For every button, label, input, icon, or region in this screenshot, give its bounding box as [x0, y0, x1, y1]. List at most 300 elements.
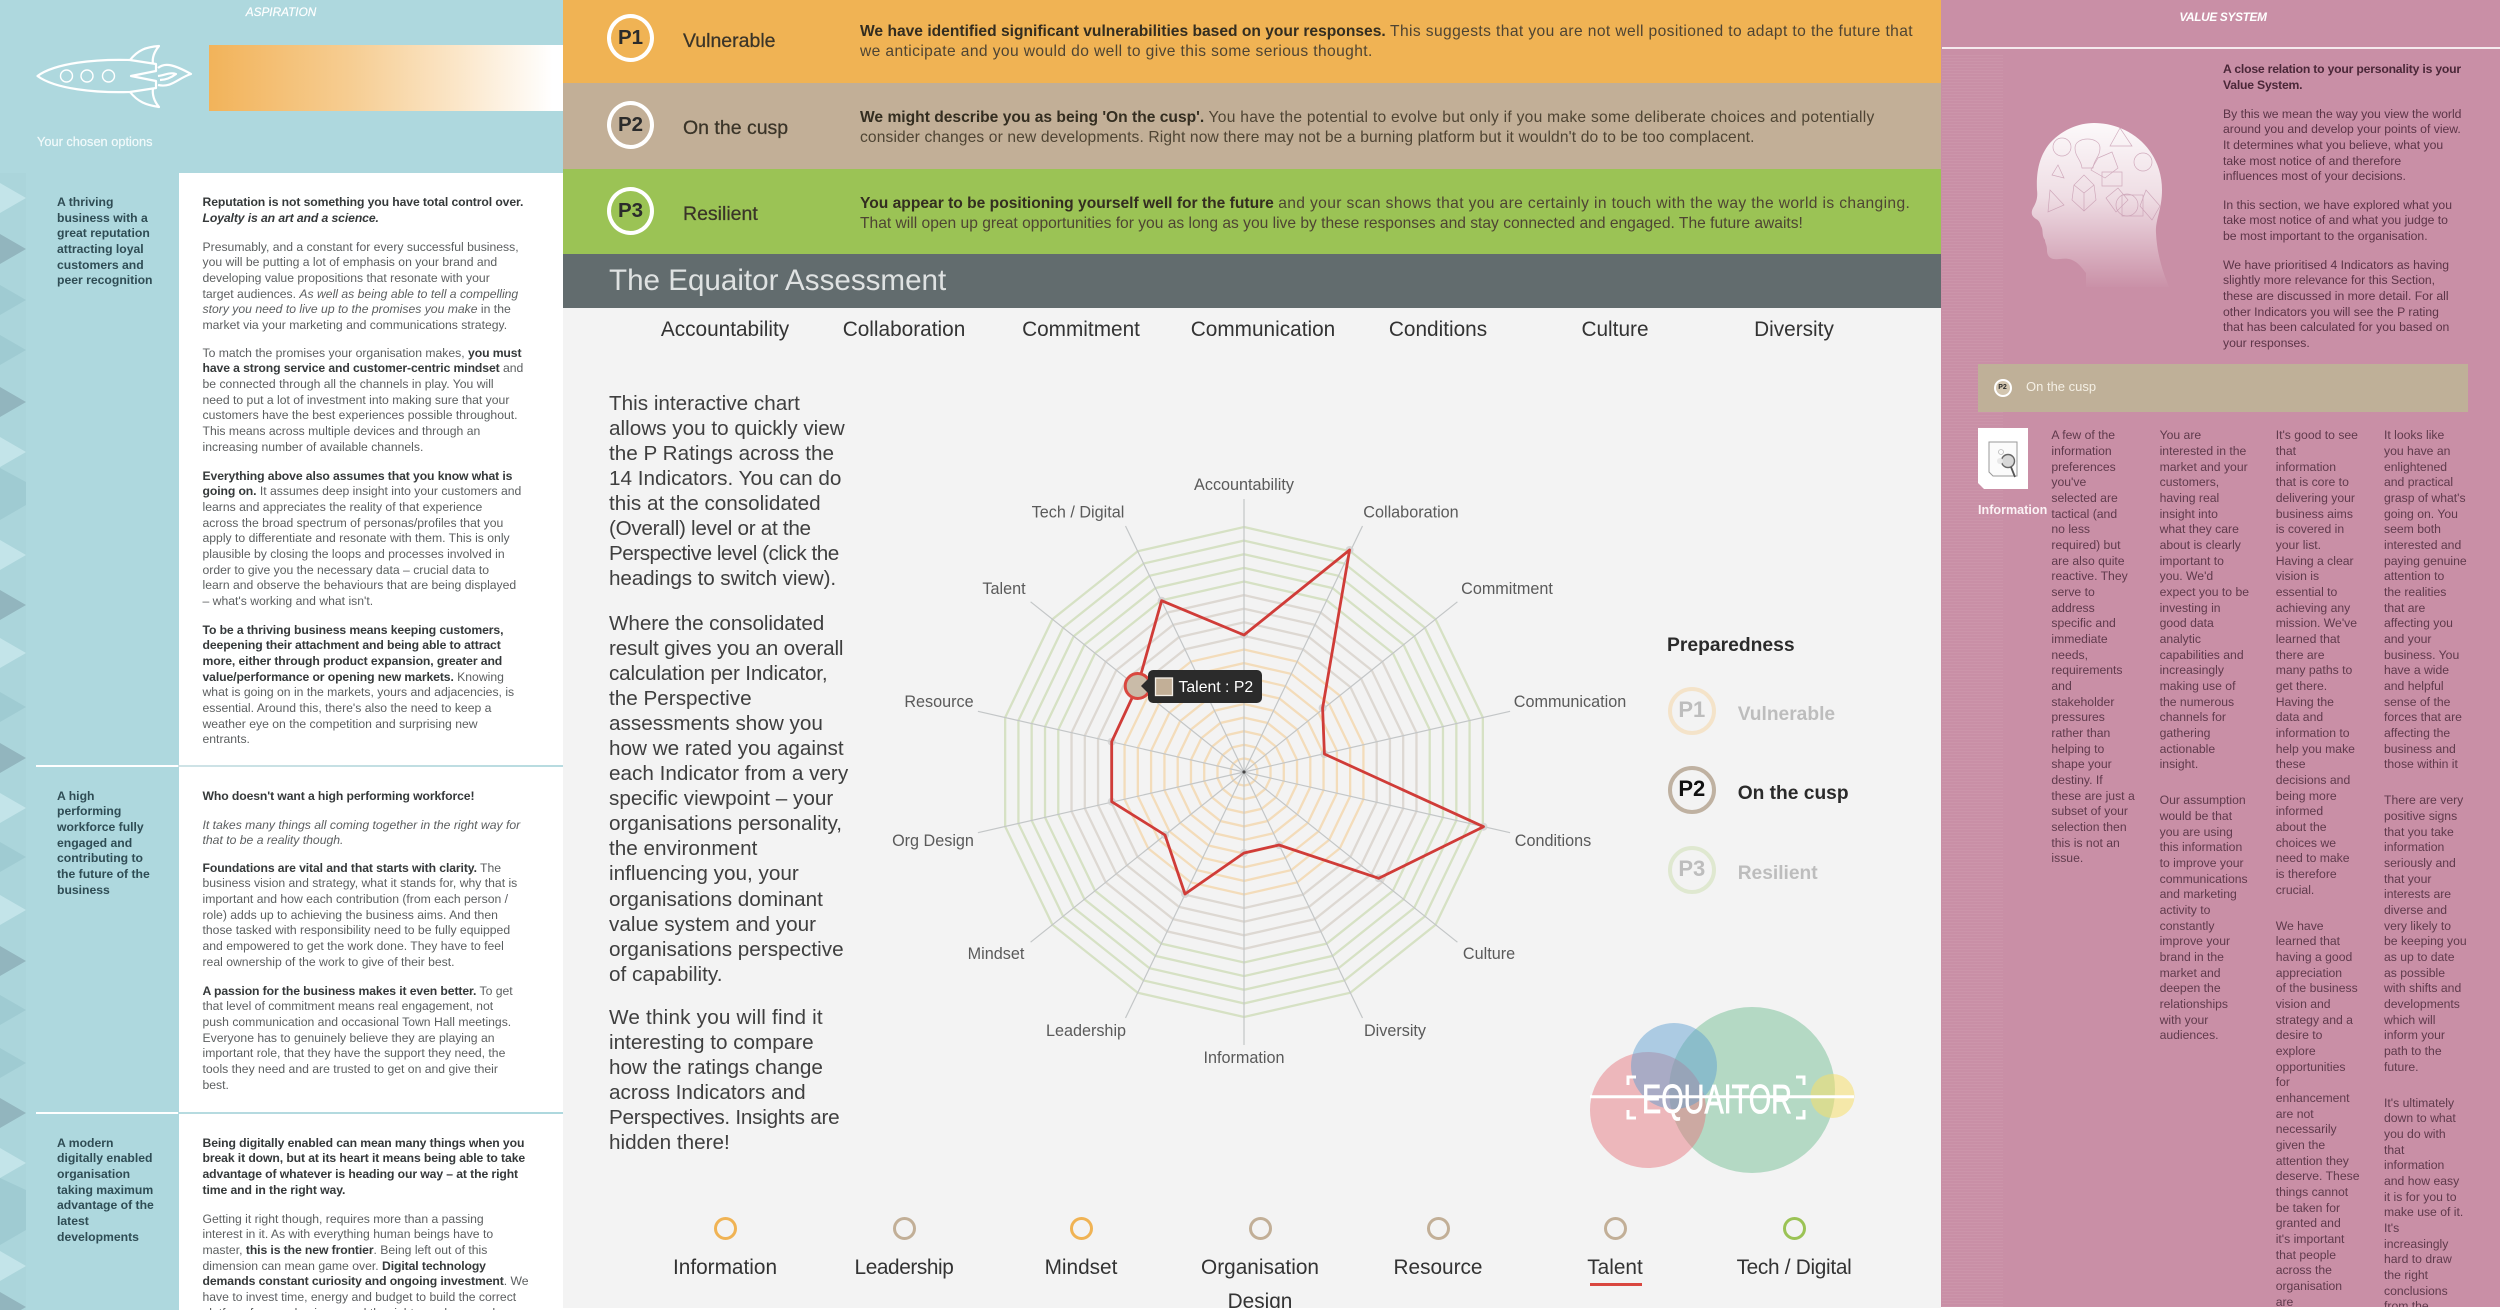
paragraph one: capabilities and: [2160, 648, 2244, 662]
paragraph two: would be that: [2160, 809, 2232, 823]
text: to be a thriving business: [202, 623, 514, 746]
paragraph two: of the business: [2276, 981, 2358, 995]
text: chart closing: We think you will find it: [609, 1006, 823, 1028]
axis labels: Resource: [904, 693, 974, 711]
paragraph one: customers,: [2160, 475, 2219, 489]
divider: row two: [36, 1112, 563, 1114]
paragraph one: important to: [2160, 554, 2224, 568]
paragraph: subset of your: [2051, 804, 2128, 818]
text: chart explanation: calculation per Indicator,: [609, 662, 827, 685]
paragraph: tactical (and: [2051, 507, 2117, 521]
text: a passion: A passion for the business makes it even better. To get: [202, 984, 513, 998]
paragraph two: brand in the: [2160, 950, 2224, 964]
dot: tech digital: [1783, 1217, 1806, 1240]
tab: organisation design: Organisation: [1201, 1256, 1319, 1279]
paragraph two: for: [2276, 1075, 2290, 1089]
tab: leadership: Leadership: [855, 1256, 953, 1279]
axis labels: Communication: [1514, 693, 1626, 711]
paragraph one: these: [2276, 757, 2306, 771]
paragraph three: it is for you to: [2384, 1190, 2456, 1204]
text: a passion: important role, that they have the support they need, the: [202, 1046, 505, 1060]
tab: tech digital: Tech / Digital: [1737, 1256, 1851, 1279]
paragraph two: There are very: [2384, 793, 2463, 807]
paragraph one: choices we: [2276, 836, 2336, 850]
paragraph one: affecting the: [2384, 726, 2450, 740]
label: resilient: Resilient: [683, 203, 758, 225]
text: being digitally enabled: [202, 1136, 525, 1197]
option label: digitally enabled organisation: digitally enabled: [57, 1151, 152, 1165]
paragraph two: desire to: [2276, 1028, 2322, 1042]
paragraph three: increasingly: [2384, 1237, 2448, 1251]
label: on the cusp: On the cusp: [683, 117, 788, 139]
paragraph one: delivering your: [2276, 491, 2355, 505]
option label: high performing workforce: performing: [57, 804, 121, 818]
text: a passion: that level of commitment means real engagement, not: [202, 999, 493, 1013]
rating band: on the cusp: [1978, 364, 2468, 412]
option label: thriving business: [57, 195, 152, 287]
option label: digitally enabled organisation: taking maximum: [57, 1183, 153, 1197]
paragraph two: necessarily: [2276, 1122, 2337, 1136]
paragraph one: essential to: [2276, 585, 2337, 599]
paragraph: these are just a: [2051, 789, 2135, 803]
text: chart closing: across Indicators and: [609, 1081, 806, 1104]
tab: mindset: Mindset: [1045, 1256, 1117, 1279]
paragraph two: and marketing: [2160, 887, 2237, 901]
paragraph one: increasingly: [2160, 663, 2224, 677]
text: getting it right: demands constant curiosity and ongoing investment. We: [202, 1274, 529, 1288]
paragraph two: vision and: [2276, 997, 2331, 1011]
text: everything above: learn and observe the behaviours that are being displayed: [202, 578, 516, 592]
paragraph one: there are: [2276, 648, 2324, 662]
paragraph one: about is clearly: [2160, 538, 2241, 552]
option label: thriving business: customers and: [57, 258, 144, 272]
paragraph two: given the: [2276, 1138, 2325, 1152]
badge: P3: P3: [618, 198, 643, 222]
paragraph two: [2384, 793, 2467, 1075]
tab: information: Information: [673, 1256, 777, 1279]
tab: diversity: Diversity: [1754, 318, 1834, 341]
paragraph three: conclusions: [2384, 1284, 2448, 1298]
paragraph one: those within it: [2384, 757, 2458, 771]
paragraph two: diverse and: [2384, 903, 2447, 917]
text: we have prioritised: We have prioritised 4 Indicators as having: [2223, 258, 2449, 272]
label: vulnerable: Vulnerable: [683, 30, 776, 52]
text: in this section: take most notice of and what you judge to: [2223, 213, 2448, 227]
axis labels: Org Design: [892, 832, 974, 850]
legend heading: Preparedness: [1667, 634, 1795, 656]
text: everything above: plausible by closing the loops and processes involved in: [202, 547, 505, 561]
text: chart intro: the P Ratings across the: [609, 442, 834, 465]
text: by this we mean: [2223, 106, 2461, 183]
paragraph: A few of the: [2051, 428, 2115, 442]
paragraph: and: [2051, 679, 2072, 693]
paragraph two: communications: [2160, 872, 2248, 886]
legend badge: P2: P2: [1678, 776, 1705, 800]
paragraph one: analytic: [2160, 632, 2201, 646]
option label: thriving business: A thriving: [57, 195, 113, 209]
paragraph one: get there.: [2276, 679, 2327, 693]
description: P3: [860, 195, 1910, 232]
axis labels: Conditions: [1515, 832, 1591, 850]
text: a passion: Everyone has to genuinely believe they are playing an: [202, 1031, 495, 1045]
status dots row: [714, 1217, 1806, 1240]
text: reputation intro: Reputation is not something you have total control over.: [202, 195, 523, 209]
option label: digitally enabled organisation: developments: [57, 1230, 139, 1244]
paragraph three: It's: [2384, 1221, 2399, 1235]
paragraph: required) but: [2051, 538, 2120, 552]
column four: [2384, 428, 2467, 1310]
title bar: [563, 254, 1941, 308]
legend label: resilient: Resilient: [1738, 862, 1818, 884]
text: presumably: Presumably, and a constant for every successful business,: [202, 240, 519, 254]
paragraph one: data and: [2276, 710, 2323, 724]
paragraph two: market and: [2160, 966, 2221, 980]
dot: mindset: [1070, 1217, 1093, 1240]
text: to be a thriving business: weather eye on the competition and surprising new: [202, 717, 478, 731]
option label: thriving business: peer recognition: [57, 273, 152, 287]
paragraph one: the numerous: [2160, 695, 2234, 709]
text: foundations: real ownership of the work to give of their best.: [202, 955, 455, 969]
description: P1: We have identified significant vulnerabilities based on your responses. This suggests that you are not well positioned to adapt to the future that: [860, 23, 1913, 40]
paragraph: requirements: [2051, 663, 2123, 677]
text: reputation intro: Loyalty is an art and a science.: [202, 211, 379, 225]
paragraph one: that: [2276, 444, 2296, 458]
paragraph one: the realities: [2384, 585, 2446, 599]
text: chart closing: hidden there!: [609, 1131, 730, 1154]
text: to match the promises: To match the promises your organisation makes, you must: [202, 346, 521, 360]
paragraph one: attention to: [2384, 569, 2444, 583]
paragraph: information: [2051, 444, 2112, 458]
paragraph one: what they care: [2160, 522, 2239, 536]
paragraph two: Our assumption: [2160, 793, 2246, 807]
text: it takes many things: that to be a reality though.: [202, 833, 343, 847]
text: everything above: order to give you the necessary data – crucial data to: [202, 563, 489, 577]
paragraph three: the right: [2384, 1268, 2428, 1282]
paragraph two: [2276, 919, 2359, 1310]
text: foundations: and empowered to get the work done. They have to feel: [202, 939, 504, 953]
text: by this we mean: around you and develop your points of view.: [2223, 122, 2461, 136]
paragraph two: relationships: [2160, 997, 2228, 1011]
text: a passion: best.: [202, 1078, 229, 1092]
tab: communication: Communication: [1191, 318, 1335, 341]
text: chart explanation: the Perspective: [609, 687, 752, 710]
paragraph: no less: [2051, 522, 2090, 536]
legend badge: P3: P3: [1678, 856, 1705, 880]
decorative stripes: [1942, 55, 2003, 1307]
text: presumably: [202, 240, 519, 332]
paragraph: helping to: [2051, 742, 2104, 756]
text: by this we mean: By this we mean the way you view the world: [2223, 106, 2461, 120]
text: chart intro: This interactive chart: [609, 392, 800, 414]
option label: digitally enabled organisation: [57, 1136, 154, 1244]
label: information: Information: [1978, 503, 2047, 517]
badge: P2: P2: [618, 112, 643, 136]
paragraph one: sense of the: [2384, 695, 2450, 709]
text: chart explanation: [609, 612, 848, 986]
text: close relation: A close relation to your personality is your: [2223, 62, 2461, 76]
text: foundations: business vision and strategy, what it stands for, why that is: [202, 876, 517, 890]
paragraph one: [2384, 428, 2467, 773]
legend badge: P1: [1668, 686, 1716, 735]
text: chart explanation: specific viewpoint – your: [609, 787, 833, 810]
heading: value system: VALUE SYSTEM: [2179, 10, 2267, 24]
paragraph three: It's ultimately: [2384, 1096, 2454, 1110]
paragraph one: market and your: [2160, 460, 2248, 474]
legend label: on the cusp: On the cusp: [1738, 782, 1849, 804]
option label: thriving business: great reputation: [57, 226, 150, 240]
paragraph two: enhancement: [2276, 1091, 2350, 1105]
paragraph one: paying genuine: [2384, 554, 2467, 568]
option label: digitally enabled organisation: latest: [57, 1214, 89, 1228]
paragraph two: information: [2384, 840, 2444, 854]
text: foundations: Foundations are vital and that starts with clarity. The: [202, 861, 501, 875]
header divider: [1942, 47, 2500, 49]
text: getting it right: master, this is the new frontier. Being left out of this: [202, 1243, 487, 1257]
paragraph three: make use of it.: [2384, 1205, 2463, 1219]
paragraph two: having a good: [2276, 950, 2352, 964]
badge: P2: [607, 100, 654, 148]
paragraph one: vision is: [2276, 569, 2319, 583]
text: chart intro: this at the consolidated: [609, 492, 821, 515]
paragraph one: you. We'd: [2160, 569, 2213, 583]
text: everything above: across the broad spectrum of personas/profiles that you: [202, 516, 503, 530]
text: getting it right: have to invest time, energy and budget to build the correct: [202, 1290, 516, 1304]
option label: high performing workforce: business: [57, 883, 110, 897]
text: to match the promises: have a strong service and customer-centric mindset and: [202, 361, 523, 375]
paragraph two: be keeping you: [2384, 934, 2467, 948]
badge: P2 small: [1994, 379, 2012, 397]
paragraph two: explore: [2276, 1044, 2316, 1058]
label: on the cusp: On the cusp: [2026, 379, 2096, 394]
paragraph one: seem both: [2384, 522, 2441, 536]
paragraph three: you do with: [2384, 1127, 2446, 1141]
text: getting it right: dimension can mean game over. Digital technology: [202, 1259, 486, 1273]
paragraph two: that people: [2276, 1248, 2336, 1262]
text: foundations: those tasked with responsibility need to be fully equipped: [202, 923, 510, 937]
paragraph one: going on. You: [2384, 507, 2458, 521]
paragraph one: forces that are: [2384, 710, 2462, 724]
paragraph one: and your: [2384, 632, 2431, 646]
paragraph two: learned that: [2276, 934, 2340, 948]
tab: conditions: Conditions: [1389, 318, 1487, 341]
text: everything above: apply to differentiate and resonate with them. This is only: [202, 531, 510, 545]
text: chart closing: how the ratings change: [609, 1056, 823, 1079]
paragraph two: improve your: [2160, 934, 2230, 948]
axis labels: Culture: [1463, 945, 1515, 963]
option label: high performing workforce: A high: [57, 789, 94, 803]
paragraph two: We have: [2276, 919, 2324, 933]
text: everything above: Everything above also assumes that you know what is: [202, 469, 512, 483]
paragraph one: [2276, 428, 2359, 898]
paragraph two: as up to date: [2384, 950, 2454, 964]
paragraph two: to improve your: [2160, 856, 2244, 870]
paragraph two: that you take: [2384, 825, 2454, 839]
paragraph two: strategy and a: [2276, 1013, 2353, 1027]
paragraph: pressures: [2051, 710, 2105, 724]
text: by this we mean: influences most of your decisions.: [2223, 169, 2406, 183]
legend label: vulnerable: Vulnerable: [1738, 704, 1835, 725]
paragraph two: which will: [2384, 1013, 2435, 1027]
paragraph one: grasp of what's: [2384, 491, 2466, 505]
paragraph two: [2160, 793, 2248, 1042]
option label: high performing workforce: [57, 789, 150, 897]
paragraph one: investing in: [2160, 601, 2221, 615]
paragraph two: deepen the: [2160, 981, 2221, 995]
paragraph: immediate: [2051, 632, 2108, 646]
axis labels: Mindset: [968, 945, 1025, 963]
paragraph two: it's important: [2276, 1232, 2344, 1246]
text: chart explanation: organisations dominant: [609, 888, 823, 911]
paragraph: you've: [2051, 475, 2086, 489]
text: it takes many things: It takes many things all coming together in the right way for: [202, 818, 520, 832]
text: chart explanation: each Indicator from a very: [609, 762, 848, 785]
text: being digitally enabled: break it down, but at its heart it means being able to take: [202, 1151, 525, 1165]
paragraph one: about the: [2276, 820, 2327, 834]
paragraph two: interests are: [2384, 887, 2451, 901]
paragraph: rather than: [2051, 726, 2110, 740]
axis labels: Tech / Digital: [1032, 504, 1124, 522]
text: to match the promises: need to put a lot of investment into making sure that your: [202, 393, 509, 407]
panel: aspiration: [0, 0, 563, 1310]
paragraph one: is therefore: [2276, 867, 2337, 881]
paragraph: preferences: [2051, 460, 2116, 474]
paragraph one: mission. We've: [2276, 616, 2357, 630]
paragraph two: positive signs: [2384, 809, 2457, 823]
option label: thriving business: business with a: [57, 211, 148, 225]
text: presumably: you will be putting a lot of emphasis on your brand and: [202, 255, 497, 269]
paragraph one: good data: [2160, 616, 2214, 630]
icon: rocket: [36, 44, 192, 108]
text: to be a thriving business: more, either through product expansion, greater and: [202, 654, 502, 668]
paragraph three: that: [2384, 1143, 2404, 1157]
text: chart explanation: assessments show you: [609, 712, 823, 735]
paragraph two: audiences.: [2160, 1028, 2219, 1042]
paragraph one: informed: [2276, 804, 2323, 818]
band: P2 on the cusp: [563, 83, 1941, 169]
text: to be a thriving business: entrants.: [202, 732, 250, 746]
text: we have prioritised: slightly more relevance for this Section,: [2223, 273, 2435, 287]
paragraph one: is covered in: [2276, 522, 2344, 536]
option label: digitally enabled organisation: A modern: [57, 1136, 113, 1150]
text: chart explanation: organisations perspective: [609, 938, 844, 961]
panel: value system: [1941, 0, 2500, 1307]
text: to be a thriving business: deepening their attachment and being able to attract: [202, 638, 501, 652]
paragraph: issue.: [2051, 851, 2083, 865]
paragraph two: inform your: [2384, 1028, 2445, 1042]
paragraph one: have a wide: [2384, 663, 2449, 677]
tab: accountability: Accountability: [661, 318, 789, 341]
paragraph one: many paths to: [2276, 663, 2352, 677]
text: to match the promises: increasing number of available channels.: [202, 440, 423, 454]
paragraph two: organisation: [2276, 1279, 2342, 1293]
text: to match the promises: be connected through all the channels in play. You will: [202, 377, 494, 391]
option label: high performing workforce: workforce fully: [57, 820, 144, 834]
divider: row one: [36, 765, 563, 767]
paragraph one: interested and: [2384, 538, 2461, 552]
text: chart explanation: the environment: [609, 837, 757, 860]
axis labels: [892, 476, 1626, 1067]
paragraph two: across the: [2276, 1263, 2332, 1277]
paragraph two: that your: [2384, 872, 2431, 886]
text: foundations: important and how each contribution (from each person /: [202, 892, 508, 906]
text: to match the promises: This means across multiple devices and through an: [202, 424, 480, 438]
paragraph one: that are: [2384, 601, 2425, 615]
paragraph one: It looks like: [2384, 428, 2444, 442]
text: being digitally enabled: advantage of whatever is heading our way – at the right: [202, 1167, 518, 1181]
paragraph two: future.: [2384, 1060, 2419, 1074]
text: getting it right: [202, 1212, 529, 1310]
text: close relation: [2223, 62, 2461, 92]
text: being digitally enabled: Being digitally enabled can mean many things when you: [202, 1136, 524, 1150]
dot: information: [714, 1217, 737, 1240]
badge: P2 small: P2: [1998, 384, 2007, 391]
text: we have prioritised: [2223, 258, 2449, 350]
dot: leadership: [893, 1217, 916, 1240]
paragraph: shape your: [2051, 757, 2112, 771]
paragraph one: need to make: [2276, 851, 2350, 865]
text: to be a thriving business: what is going on in the markets, yours and adjacencies, is: [202, 685, 514, 699]
text: chart closing: [609, 1006, 839, 1154]
paragraph two: appreciation: [2276, 966, 2342, 980]
paragraph two: as possible: [2384, 966, 2445, 980]
legend badge: P1: P1: [1678, 696, 1705, 722]
axis labels: Talent: [982, 580, 1026, 598]
badge: P3: [607, 186, 654, 234]
option label: thriving business: attracting loyal: [57, 242, 144, 256]
paragraph: [2051, 428, 2135, 865]
text: chart explanation: how we rated you against: [609, 737, 844, 760]
tabs: indicators row one: [661, 318, 1834, 341]
paragraph two: path to the: [2384, 1044, 2442, 1058]
option label: high performing workforce: engaged and: [57, 836, 132, 850]
text: chart intro: [609, 392, 845, 590]
paragraph two: deserve. These: [2276, 1169, 2359, 1183]
paragraph one: [2160, 428, 2249, 771]
text: it takes many things: [202, 818, 521, 847]
paragraph: destiny. If: [2051, 773, 2103, 787]
text: presumably: story you need to live up to the promises you make in the: [202, 302, 511, 316]
text: by this we mean: It determines what you believe, what you: [2223, 138, 2443, 152]
paragraph one: learned that: [2276, 632, 2340, 646]
text: we have prioritised: these are discussed in more detail. For all: [2223, 289, 2449, 303]
highlighted talent point: [1125, 674, 1150, 698]
paragraph: selected are: [2051, 491, 2118, 505]
text: who doesn't want: Who doesn't want a high performing workforce!: [202, 789, 474, 803]
text: getting it right: interest in it. As with everything human beings have to: [202, 1227, 493, 1241]
option label: high performing workforce: contributing to: [57, 851, 143, 865]
paragraph two: granted and: [2276, 1216, 2341, 1230]
paragraph one: enlightened: [2384, 460, 2447, 474]
paragraph one: Having a clear: [2276, 554, 2354, 568]
paragraph three: [2384, 1096, 2467, 1310]
data points: [1108, 546, 1488, 898]
text: foundations: [202, 861, 517, 969]
text: chart intro: allows you to quickly view: [609, 417, 845, 440]
paragraph one: being more: [2276, 789, 2337, 803]
paragraph three: and how easy: [2384, 1174, 2459, 1188]
description: P3: That will open up great opportunities for you as long as you live by these responses and stay connected and engaged. The future awaits!: [860, 215, 1803, 232]
text: a passion: push communication and occasional Town Hall meetings.: [202, 1015, 511, 1029]
option label: high performing workforce: the future of the: [57, 867, 150, 881]
paragraph one: It's good to see: [2276, 428, 2358, 442]
text: chart intro: headings to switch view).: [609, 567, 836, 590]
paragraph one: interested in the: [2160, 444, 2246, 458]
paragraph one: insight into: [2160, 507, 2218, 521]
paragraph one: affecting you: [2384, 616, 2453, 630]
paragraph one: decisions and: [2276, 773, 2350, 787]
text: chart explanation: Where the consolidated: [609, 612, 824, 634]
legend badge: P2: [1668, 766, 1716, 814]
